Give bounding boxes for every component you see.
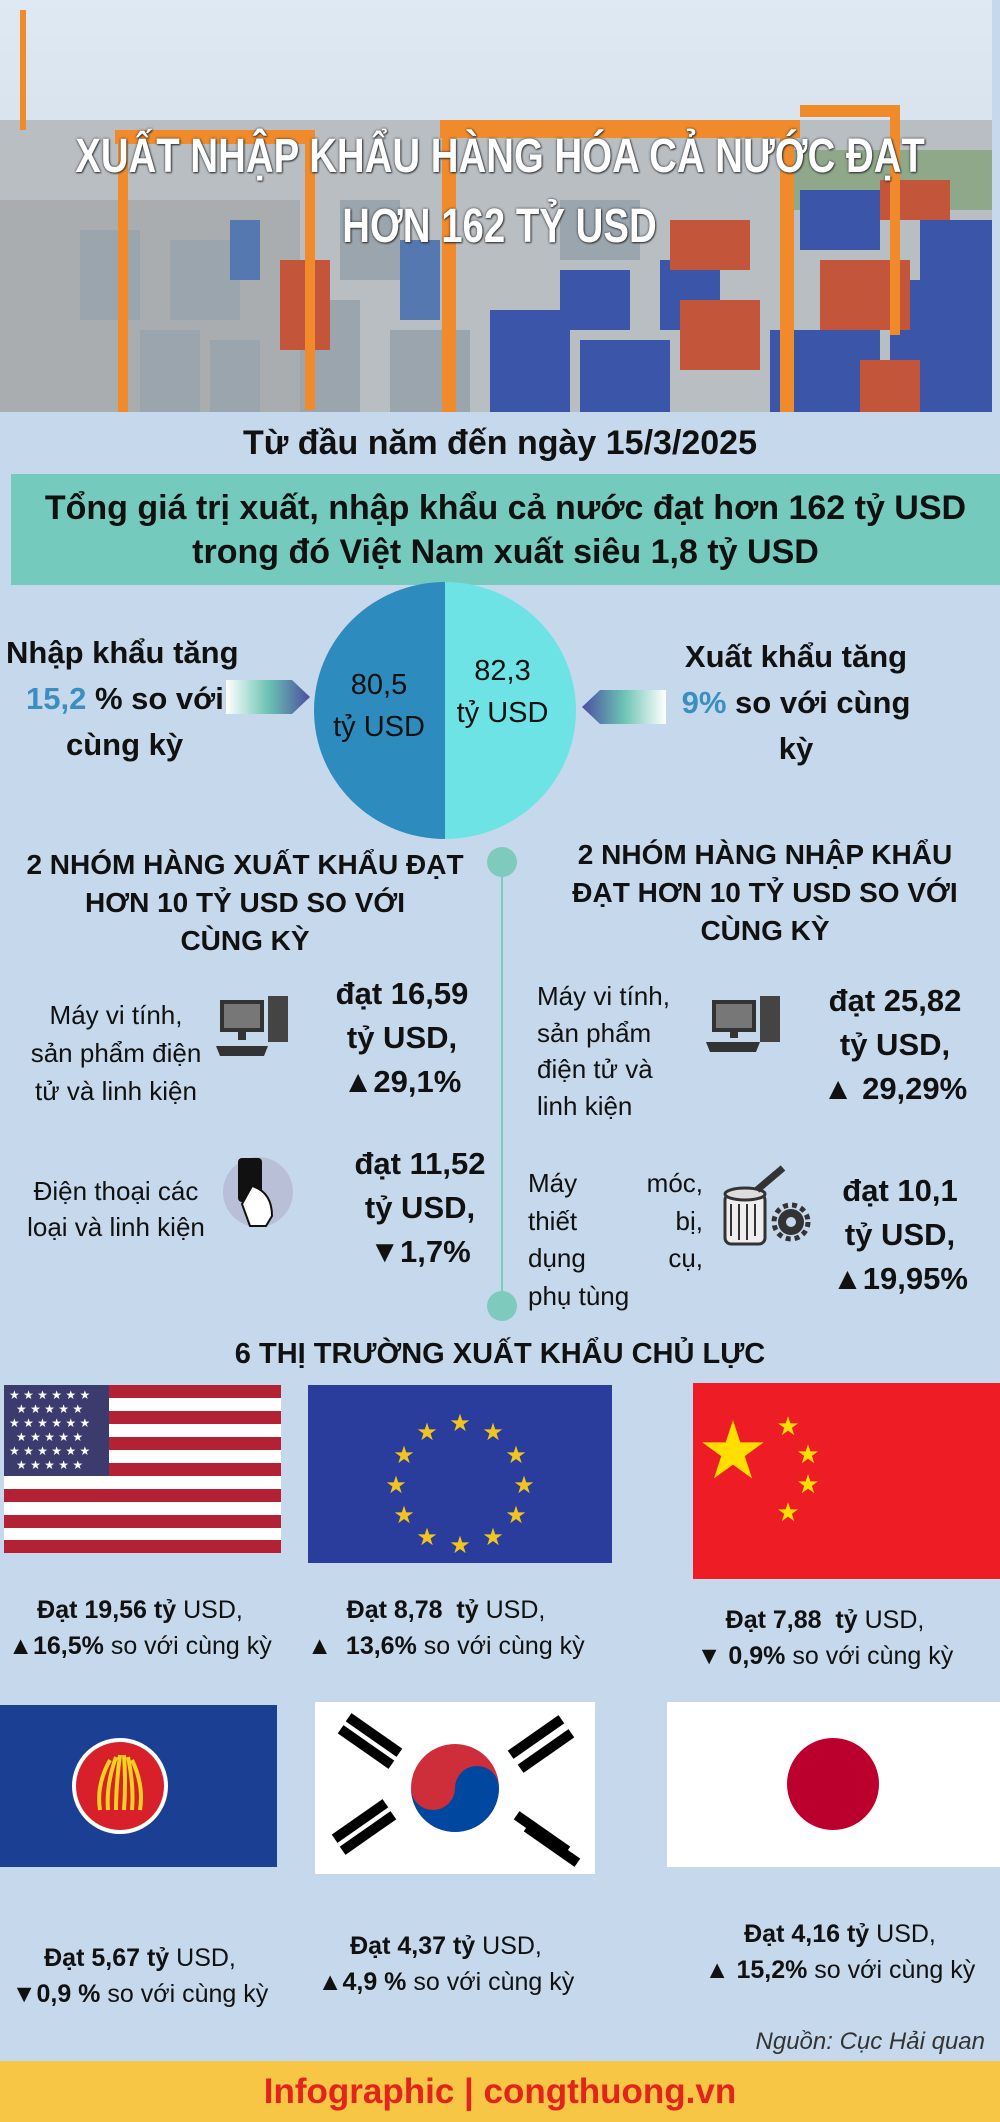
flag: EU: ★ — [513, 1472, 535, 1499]
import value 2: đạt 10,1 — [842, 1173, 958, 1208]
summary banner: Tổng giá trị xuất, nhập khẩu cả nước đạt hơn 162 tỷ USD — [45, 489, 966, 527]
import item 2: machinery: bị, — [676, 1206, 703, 1236]
flag: EU: ★ — [482, 1524, 504, 1551]
caption China — [697, 1606, 954, 1670]
caption USA — [8, 1596, 272, 1660]
import value 1: đạt 25,82 — [829, 983, 961, 1018]
import value 1: tỷ USD, — [840, 1027, 950, 1062]
import item 1: computers: linh kiện — [537, 1090, 632, 1120]
pie label import: tỷ USD — [333, 711, 425, 743]
flag: Japan — [667, 1702, 1000, 1867]
flag: China — [693, 1383, 1000, 1579]
pie label import: 80,5 — [351, 669, 407, 701]
export value 2 — [354, 1146, 485, 1269]
flag: EU: ★ — [449, 1532, 471, 1559]
flag: EU — [308, 1385, 612, 1563]
import value 2 — [832, 1173, 968, 1296]
import value 2: tỷ USD, — [845, 1217, 955, 1252]
flag: EU: ★ — [449, 1410, 471, 1437]
icon: computer — [216, 996, 288, 1056]
import value 1: ▲ 29,29% — [823, 1071, 967, 1106]
export item 2: phones: Điện thoại các — [34, 1176, 198, 1206]
heading markets: 6 THỊ TRƯỜNG XUẤT KHẨU CHỦ LỰC — [235, 1338, 765, 1370]
flag: EU: ★ — [416, 1524, 438, 1551]
heading export groups: CÙNG KỲ — [180, 925, 310, 956]
export text: Xuất khẩu tăng — [685, 639, 907, 674]
caption ASEAN: Đạt 5,67 tỷ USD, — [44, 1944, 236, 1972]
export value 2: tỷ USD, — [365, 1190, 475, 1225]
flag: USA: ★ ★ ★ ★ ★ ★ — [9, 1388, 90, 1402]
flag: USA: ★ ★ ★ ★ ★ — [16, 1458, 83, 1472]
flag: EU: ★ — [505, 1442, 527, 1469]
pie chart: import vs export — [314, 582, 576, 839]
summary banner: trong đó Việt Nam xuất siêu 1,8 tỷ USD — [192, 533, 819, 571]
import item 2: machinery: phụ tùng — [528, 1280, 629, 1310]
caption Korea — [318, 1932, 574, 1996]
flag: ASEAN — [0, 1705, 277, 1867]
export item 2: phones: loại và linh kiện — [27, 1212, 205, 1242]
caption Japan — [705, 1920, 976, 1984]
source: Nguồn: Cục Hải quan — [756, 2028, 985, 2055]
flag: EU: ★ — [505, 1502, 527, 1529]
flag: USA: ★ ★ ★ ★ ★ ★ — [9, 1416, 90, 1430]
heading import groups: 2 NHÓM HÀNG NHẬP KHẨU — [578, 839, 952, 870]
import item 2: machinery: Máy — [528, 1168, 577, 1198]
import item 2: machinery: thiết — [528, 1206, 577, 1236]
subtitle date: Từ đầu năm đến ngày 15/3/2025 — [243, 424, 757, 462]
caption ASEAN — [12, 1944, 268, 2008]
caption EU — [307, 1596, 585, 1660]
export value 2: ▼1,7% — [369, 1234, 471, 1269]
import item 1: computers: Máy vi tính, — [537, 981, 670, 1011]
caption EU: Đạt 8,78 tỷ USD, — [347, 1596, 545, 1624]
flag: EU: ★ — [385, 1472, 407, 1499]
caption China: ▼ 0,9% so với cùng kỳ — [697, 1642, 953, 1670]
pie label export — [457, 655, 548, 729]
export text: 9% so với cùng — [682, 685, 910, 720]
summary banner — [11, 474, 1000, 585]
heading export groups: 2 NHÓM HÀNG XUẤT KHẨU ĐẠT — [26, 849, 464, 880]
caption EU: ▲ 13,6% so với cùng kỳ — [307, 1632, 585, 1660]
import text — [6, 635, 239, 762]
export text — [682, 639, 910, 766]
import item 1: computers: điện tử và — [537, 1054, 653, 1084]
import item 2: machinery: móc, — [647, 1168, 703, 1198]
caption Japan: Đạt 4,16 tỷ USD, — [744, 1920, 936, 1948]
flag: USA: ★ ★ ★ ★ ★ ★ — [9, 1444, 90, 1458]
flag: USA — [4, 1385, 281, 1553]
flag: Korea — [315, 1702, 595, 1874]
heading import groups — [572, 839, 958, 946]
divider line with dots — [487, 847, 517, 1321]
heading import groups: ĐẠT HƠN 10 TỶ USD SO VỚI — [572, 877, 958, 908]
caption USA: Đạt 19,56 tỷ USD, — [37, 1596, 243, 1624]
caption Japan: ▲ 15,2% so với cùng kỳ — [705, 1956, 975, 1984]
export item 1: computers: Máy vi tính, — [50, 1000, 182, 1030]
export value 1: ▲29,1% — [343, 1064, 461, 1099]
heading import groups: CÙNG KỲ — [700, 915, 830, 946]
export value 1 — [336, 976, 468, 1099]
import text: 15,2 % so với — [26, 681, 224, 716]
caption ASEAN: ▼0,9 % so với cùng kỳ — [12, 1980, 268, 2008]
icon: computer (import) — [706, 996, 780, 1052]
flag: China: ★ — [776, 1497, 800, 1527]
caption Korea: ▲4,9 % so với cùng kỳ — [318, 1968, 574, 1996]
import item 2: machinery: dụng — [528, 1243, 586, 1273]
export value 1: tỷ USD, — [347, 1020, 457, 1055]
export text: kỳ — [779, 731, 813, 766]
export item 2: phones — [27, 1176, 205, 1242]
flag: EU: ★ — [416, 1419, 438, 1446]
title: HƠN 162 TỶ USD — [343, 200, 657, 253]
pie label import — [333, 669, 425, 743]
caption USA: ▲16,5% so với cùng kỳ — [8, 1632, 272, 1660]
import item 1: computers: sản phẩm — [537, 1018, 651, 1048]
flag: USA: ★ ★ ★ ★ ★ — [16, 1402, 83, 1416]
import value 1 — [823, 983, 967, 1106]
export item 1: computers: sản phẩm điện — [31, 1038, 201, 1068]
export value 1: đạt 16,59 — [336, 976, 468, 1011]
flag: EU: ★ — [482, 1419, 504, 1446]
import value 2: ▲19,95% — [832, 1261, 968, 1296]
pie label export: 82,3 — [474, 655, 531, 687]
export item 1: computers — [31, 1000, 201, 1106]
arrow right — [226, 680, 310, 714]
caption China: Đạt 7,88 tỷ USD, — [726, 1606, 924, 1634]
flag: China: ★ — [796, 1439, 820, 1469]
arrow left — [582, 690, 666, 724]
flag: China: ★ — [796, 1469, 820, 1499]
flag: EU: ★ — [393, 1502, 415, 1529]
import item 1: computers — [537, 981, 670, 1120]
title: XUẤT NHẬP KHẨU HÀNG HÓA CẢ NƯỚC ĐẠT — [75, 130, 925, 183]
import text: cùng kỳ — [66, 727, 183, 762]
caption Korea: Đạt 4,37 tỷ USD, — [350, 1932, 542, 1960]
footer bar: Infographic | congthuong.vn — [264, 2072, 736, 2111]
heading export groups: HƠN 10 TỶ USD SO VỚI — [85, 887, 405, 918]
hero photo: container port — [0, 0, 992, 412]
icon: gears — [724, 1165, 810, 1246]
import text: Nhập khẩu tăng — [6, 635, 239, 670]
import item 2: machinery: cụ, — [668, 1243, 703, 1273]
heading export groups — [26, 849, 464, 956]
import item 2: machinery — [528, 1168, 703, 1310]
flag: China: ★ — [697, 1406, 769, 1495]
flag: EU: ★ — [393, 1442, 415, 1469]
footer bar — [0, 2061, 1000, 2122]
title — [74, 126, 927, 253]
icon: phone — [223, 1157, 293, 1227]
export value 2: đạt 11,52 — [354, 1146, 485, 1181]
export item 1: computers: tử và linh kiện — [35, 1076, 197, 1106]
flag: China: ★ — [776, 1411, 800, 1441]
pie label export: tỷ USD — [457, 697, 548, 729]
flag: USA: ★ ★ ★ ★ ★ — [16, 1430, 83, 1444]
